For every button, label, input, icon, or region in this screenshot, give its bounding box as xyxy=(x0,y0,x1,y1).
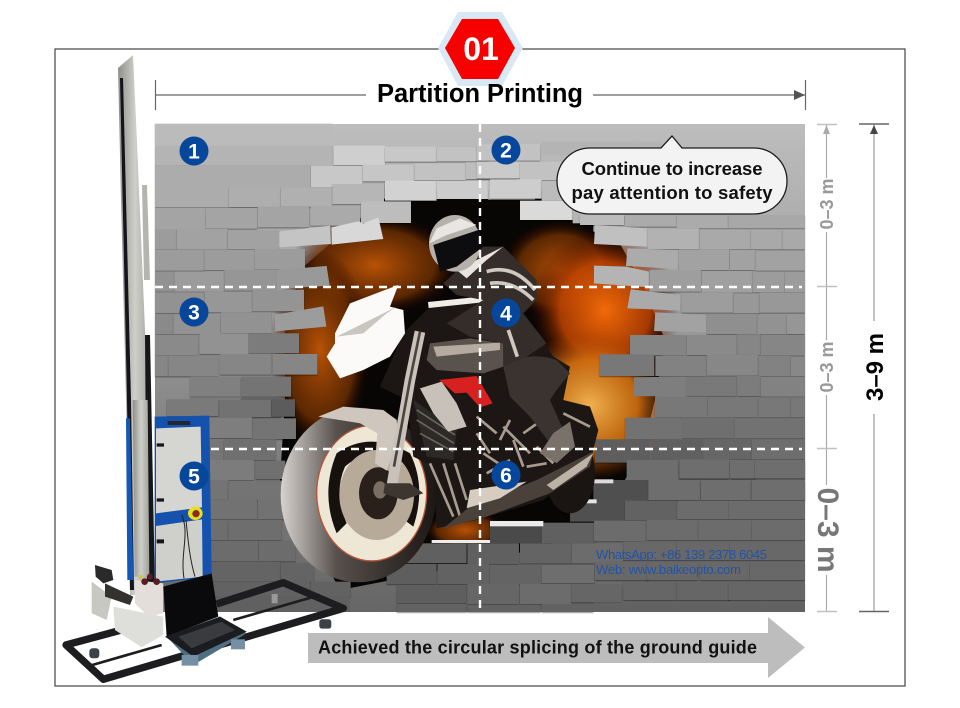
marker 5: 5 xyxy=(188,466,200,488)
marker 2 xyxy=(492,136,520,164)
wall opening with fire xyxy=(270,190,680,590)
print carriage xyxy=(92,565,163,647)
cable chain xyxy=(145,335,155,590)
section height dimensions: 0–3 m xyxy=(817,341,837,393)
speech bubble: pay attention to safety xyxy=(572,182,773,203)
printed wall mural xyxy=(155,124,805,612)
column rail xyxy=(118,55,152,595)
fairing side panel xyxy=(420,382,467,432)
marker 3 xyxy=(180,298,208,326)
total height dimension: 3–9 m xyxy=(862,333,889,401)
speech bubble xyxy=(557,136,787,214)
marker 1 xyxy=(180,136,208,166)
headlight fairing xyxy=(327,285,405,378)
radiator xyxy=(413,400,457,460)
bricks upper left xyxy=(155,124,535,417)
website and WhatsApp text: WhatsApp: +86 139 2378 6045 xyxy=(596,547,767,562)
number markers xyxy=(180,136,520,490)
fork xyxy=(392,332,420,487)
bricks bottom right xyxy=(387,460,805,612)
cabinet back strip xyxy=(126,418,133,580)
rim dark inner band xyxy=(328,442,419,533)
marker 2: 2 xyxy=(500,140,512,162)
cabinet panel lower xyxy=(156,519,203,582)
hub xyxy=(359,467,398,519)
panel handles xyxy=(157,443,164,543)
body and engine mass xyxy=(380,297,598,528)
handlebar xyxy=(428,299,483,305)
outer frame xyxy=(55,49,905,686)
column black edge xyxy=(120,78,134,590)
cables xyxy=(182,515,195,578)
bricks top centre right xyxy=(477,142,677,232)
ground guide arrow: Achieved the circular splicing of the ground guide xyxy=(318,638,757,658)
wall base xyxy=(155,124,805,612)
helmet xyxy=(429,215,481,272)
total height dimension xyxy=(859,124,889,612)
marker 5 xyxy=(180,462,208,490)
front fender xyxy=(318,407,398,471)
section height dimensions: 0–3 m xyxy=(817,178,837,230)
brake disc xyxy=(339,450,414,540)
engine highlights xyxy=(430,413,590,517)
marker 6 xyxy=(492,460,520,490)
heading with width dimension xyxy=(155,80,806,110)
section height dimensions: 0–3 m xyxy=(811,487,844,573)
cabinet panel upper xyxy=(156,427,202,513)
laptop tray feet xyxy=(182,639,245,666)
ground rail frame xyxy=(66,583,343,679)
red panel xyxy=(439,376,493,407)
dashed partition lines xyxy=(155,124,802,612)
laptop xyxy=(163,573,247,665)
casters xyxy=(89,594,331,658)
bricks lower left xyxy=(167,399,351,612)
motorcycle and rider xyxy=(281,215,598,582)
section height dimensions xyxy=(811,124,844,612)
printer machine xyxy=(66,55,343,679)
bricks right side xyxy=(580,215,805,501)
cabinet frame xyxy=(155,416,212,583)
speech bubble: Continue to increase xyxy=(582,158,762,179)
badge: 01 xyxy=(438,12,523,86)
emergency stop button xyxy=(188,507,203,520)
rider leg xyxy=(503,356,570,443)
website and WhatsApp text: Web: www.baikeopto.com xyxy=(596,562,741,577)
front rim xyxy=(317,426,427,561)
badge: 01: 01 xyxy=(463,31,499,67)
marker 3: 3 xyxy=(188,302,200,324)
rear wheel xyxy=(545,433,595,513)
marker 6: 6 xyxy=(500,464,512,488)
rail lower section xyxy=(133,400,149,577)
marker 1: 1 xyxy=(188,140,200,164)
ground guide arrow xyxy=(308,617,805,678)
heading with width dimension: Partition Printing xyxy=(377,80,583,108)
front tire xyxy=(281,408,436,582)
rider jacket xyxy=(443,247,547,367)
marker 4 xyxy=(492,298,520,328)
fuel tank xyxy=(427,338,503,373)
marker 4: 4 xyxy=(500,302,512,326)
website and WhatsApp text xyxy=(596,547,767,577)
column back panel xyxy=(142,185,150,280)
belly pan xyxy=(443,452,593,528)
